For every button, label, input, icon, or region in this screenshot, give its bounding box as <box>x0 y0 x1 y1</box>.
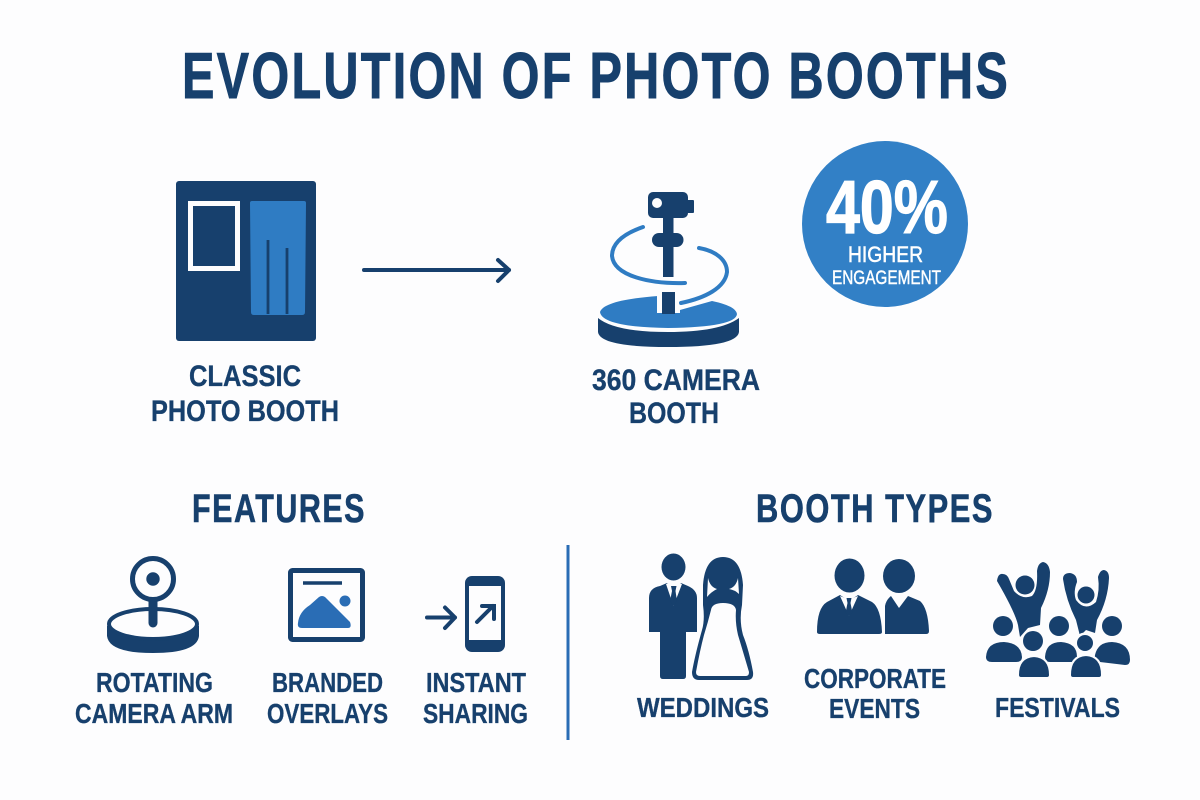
heading: booth types: BOOTH TYPES <box>756 487 994 531</box>
icon: sharing arrow <box>427 608 455 628</box>
label: rotating camera arm: CAMERA ARM <box>75 698 233 729</box>
label: corporate events: CORPORATE <box>804 663 946 694</box>
feature: branded overlays <box>267 570 388 729</box>
label: instant sharing <box>423 667 528 729</box>
label: rotating camera arm <box>75 667 233 729</box>
booth type: corporate events <box>804 558 946 724</box>
callout: 40% higher engagement: 40% <box>826 165 948 249</box>
icon: branded overlay image <box>290 570 362 640</box>
label: classic photo booth: PHOTO BOOTH <box>151 395 339 428</box>
label: rotating camera arm: ROTATING <box>96 667 213 698</box>
label: classic photo booth: CLASSIC <box>189 360 301 393</box>
feature: rotating camera arm <box>75 558 233 729</box>
heading: features: FEATURES <box>192 487 366 531</box>
label: 360 camera booth <box>592 364 760 430</box>
label: instant sharing: INSTANT <box>426 667 526 698</box>
callout: 40% higher engagement: HIGHER <box>848 242 923 267</box>
label: branded overlays: OVERLAYS <box>267 698 388 729</box>
booth type: weddings <box>637 554 769 723</box>
panel: 360 camera booth <box>592 192 760 430</box>
callout: 40% higher engagement: ENGAGEMENT <box>832 268 941 289</box>
icon: 360 camera <box>598 192 739 347</box>
feature: instant sharing <box>423 576 528 729</box>
arrow: classic to 360 <box>364 260 509 281</box>
label: corporate events: EVENTS <box>829 693 920 724</box>
icon: bride <box>692 557 753 680</box>
label: branded overlays <box>267 667 388 729</box>
label: instant sharing: SHARING <box>423 698 528 729</box>
panel: classic photo booth <box>151 181 339 428</box>
icon: businessmen <box>817 558 929 634</box>
label: corporate events <box>804 663 946 724</box>
label: 360 camera booth: 360 CAMERA <box>592 364 760 397</box>
label: classic photo booth <box>151 360 339 428</box>
icon: rotating arm <box>107 558 199 653</box>
icon: phone <box>465 576 505 652</box>
icon: classic booth <box>176 181 316 341</box>
icon: festival crowd <box>986 562 1130 678</box>
label: 360 camera booth: BOOTH <box>629 397 719 430</box>
label: festivals: FESTIVALS <box>995 692 1120 723</box>
booth type: festivals <box>986 562 1130 723</box>
label: weddings: WEDDINGS <box>637 692 769 723</box>
callout: 40% higher engagement <box>802 141 968 307</box>
label: branded overlays: BRANDED <box>272 667 383 698</box>
icon: groom <box>649 554 697 679</box>
